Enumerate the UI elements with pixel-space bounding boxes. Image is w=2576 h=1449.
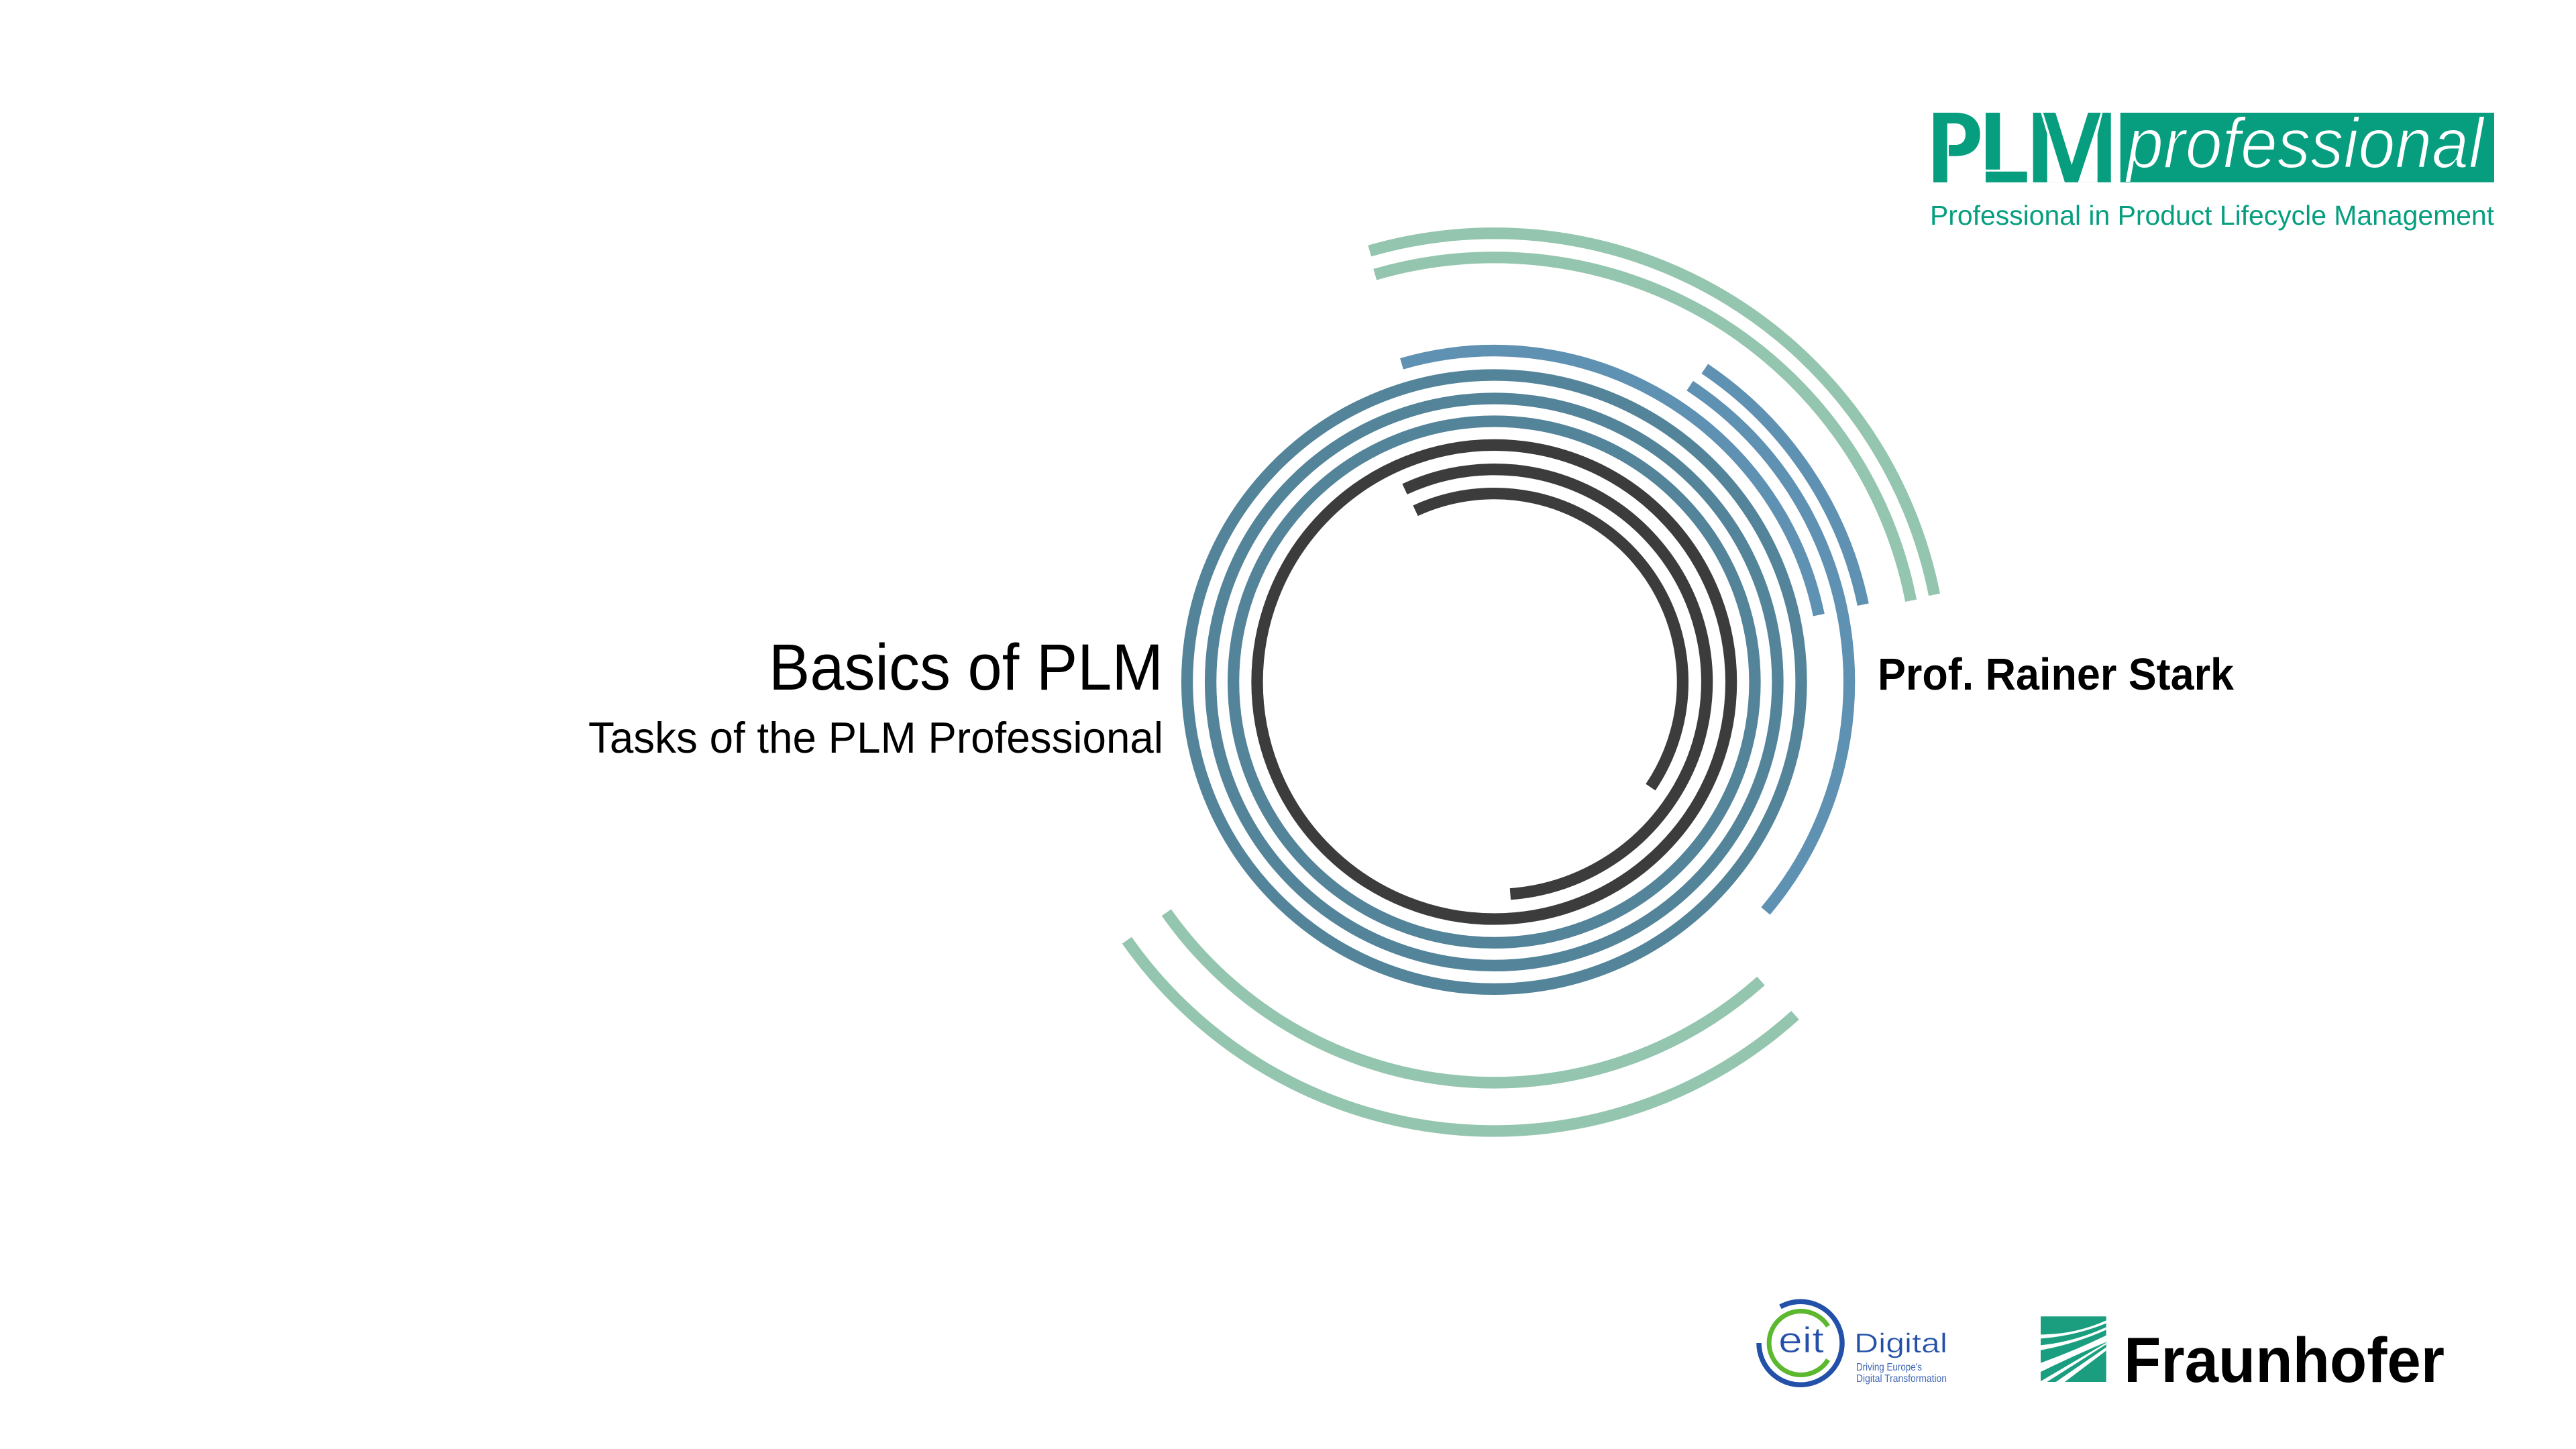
presenter name: Prof. Rainer Stark	[1878, 649, 2235, 700]
light green outer arcs, bottom	[1127, 912, 1795, 1131]
logo green band	[2121, 113, 2494, 182]
eit green arc	[1769, 1311, 1828, 1375]
logo letter L	[1986, 113, 2027, 182]
logo: EIT Digital	[1759, 1301, 1947, 1385]
logo letter M	[2033, 113, 2111, 182]
eit tagline line two: Digital Transformation	[1856, 1373, 1947, 1385]
logo: PLM professional	[1930, 104, 2495, 231]
concentric arcs graphic	[1127, 233, 1935, 1131]
Digital wordmark: Digital	[1854, 1328, 1947, 1358]
eit tagline line one: Driving Europe's	[1856, 1362, 1922, 1373]
logo letter P	[1933, 113, 1980, 182]
logo tagline: Professional in Product Lifecycle Management	[1930, 200, 2495, 231]
title: Basics of PLM	[769, 631, 1163, 704]
teal full rings	[1187, 375, 1801, 989]
light green outer arcs, top	[1370, 233, 1935, 600]
logo: PLM professional: professional	[2125, 104, 2485, 183]
Fraunhofer wordmark: Fraunhofer	[2124, 1325, 2445, 1396]
eit wordmark: eit	[1778, 1320, 1824, 1360]
blue arcs	[1402, 351, 1863, 911]
logo: Fraunhofer	[2041, 1316, 2445, 1396]
dark inner rings	[1257, 445, 1731, 919]
Fraunhofer emblem	[2041, 1316, 2106, 1382]
subtitle: Tasks of the PLM Professional	[588, 713, 1163, 762]
eit blue arc	[1759, 1301, 1842, 1385]
